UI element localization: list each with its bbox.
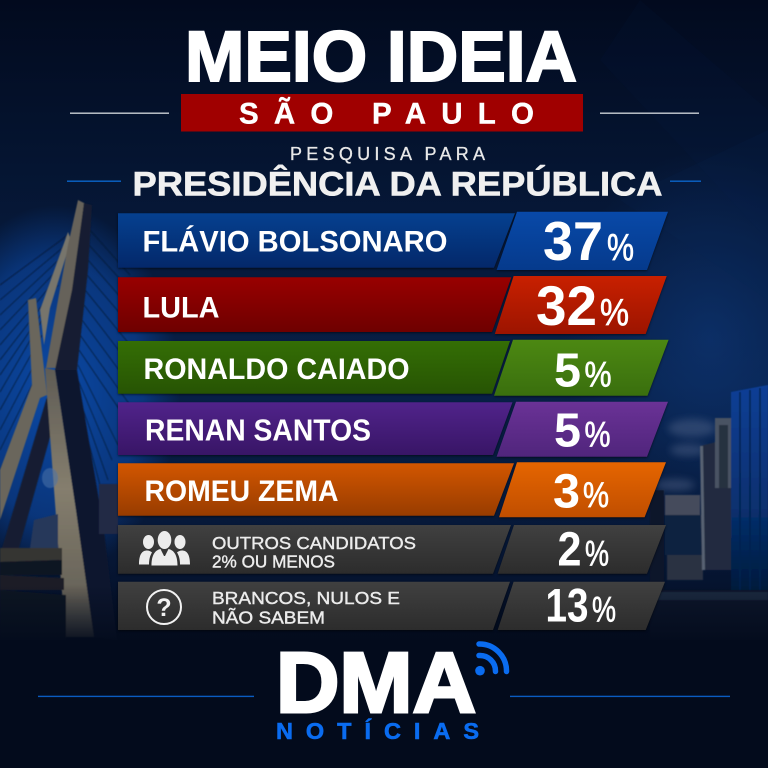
row: Romeu Zema 3%: 3 [553,466,580,518]
icon: group of people [139,531,190,566]
value: 2%: 2 [558,524,582,577]
heading: Presidência da República: PRESIDÊNCIA DA REPÚBLICA [132,164,662,204]
value: 2% [558,524,609,577]
row: Flávio Bolsonaro 37%: % [607,227,634,269]
logo wordmark DMA: DMA [276,636,476,731]
distant buildings behind mast [30,514,58,548]
row: Romeu Zema 3% [118,462,666,518]
logo wordmark Notícias: NOTÍCIAS [276,717,479,744]
row: Lula 32%: LULA [142,292,220,325]
main mast, dark upper face [55,203,92,370]
label: 2% ou menos: 2% OU MENOS [212,552,335,572]
row: Lula 32% [118,274,667,337]
row: Renan Santos 5% [118,402,668,458]
main mast, dark lower face [55,370,117,640]
row: Flávio Bolsonaro 37%: FLÁVIO BOLSONARO [142,225,448,259]
row: Ronaldo Caiado 5%: % [584,356,612,394]
row: Ronaldo Caiado 5%: 5 [554,344,581,398]
secondary mast, far leg [2,397,52,548]
row: Brancos, nulos e não sabem 13% [118,579,665,632]
row: Renan Santos 5%: % [584,416,610,454]
row: Ronaldo Caiado 5%: RONALDO CAIADO [144,353,410,386]
row: Outros candidatos 2% [118,524,666,577]
icon: question mark: ? [156,594,172,622]
left blue rule [67,180,121,182]
banner: São Paulo [181,94,583,132]
row: Flávio Bolsonaro 37%: 37 [543,210,603,272]
logo: DMA Notícias [276,636,507,744]
label: Não sabem: NÃO SABEM [212,606,325,628]
row: Ronaldo Caiado 5% [118,340,669,398]
main mast, lit lower face [45,368,94,637]
ground [650,590,768,640]
title: Meio Ideia: MEIO IDEIA [185,18,577,97]
bridge illustration [0,200,130,640]
banner: São Paulo: SÃO PAULO [239,96,534,130]
row: Renan Santos 5%: 5 [554,404,581,458]
skyline on the right [650,385,768,640]
left footer rule [38,696,254,697]
right white rule [600,112,699,114]
icon: question mark [147,590,181,624]
right footer rule [510,696,730,697]
grey tower [700,442,732,570]
row: Flávio Bolsonaro 37% [118,210,668,272]
right blue rule [670,180,701,182]
row: Lula 32%: 32 [536,274,597,337]
row: Romeu Zema 3%: % [583,476,609,515]
row: Lula 32%: % [600,292,629,334]
main mast, lit upper face [46,200,84,368]
subtitle: Pesquisa para: PESQUISA PARA [290,144,485,164]
clouds [655,419,716,491]
road deck [0,548,62,562]
bridge cables [0,230,130,500]
bottom fade [0,585,768,647]
left white rule [70,112,169,114]
label: Outros candidatos: OUTROS CANDIDATOS [212,533,416,553]
value: 2%: % [585,535,609,574]
value: 13%: 13 [546,579,588,632]
blue glass tower [731,385,768,590]
label: Brancos, nulos e: BRANCOS, NULOS E [212,588,400,608]
row: Romeu Zema 3%: ROMEU ZEMA [144,475,338,508]
secondary mast, lit leg [0,298,47,520]
small buildings [665,495,700,517]
row: Renan Santos 5%: RENAN SANTOS [145,413,371,448]
icon: wifi signal [475,644,507,676]
value: 13%: % [592,591,616,630]
